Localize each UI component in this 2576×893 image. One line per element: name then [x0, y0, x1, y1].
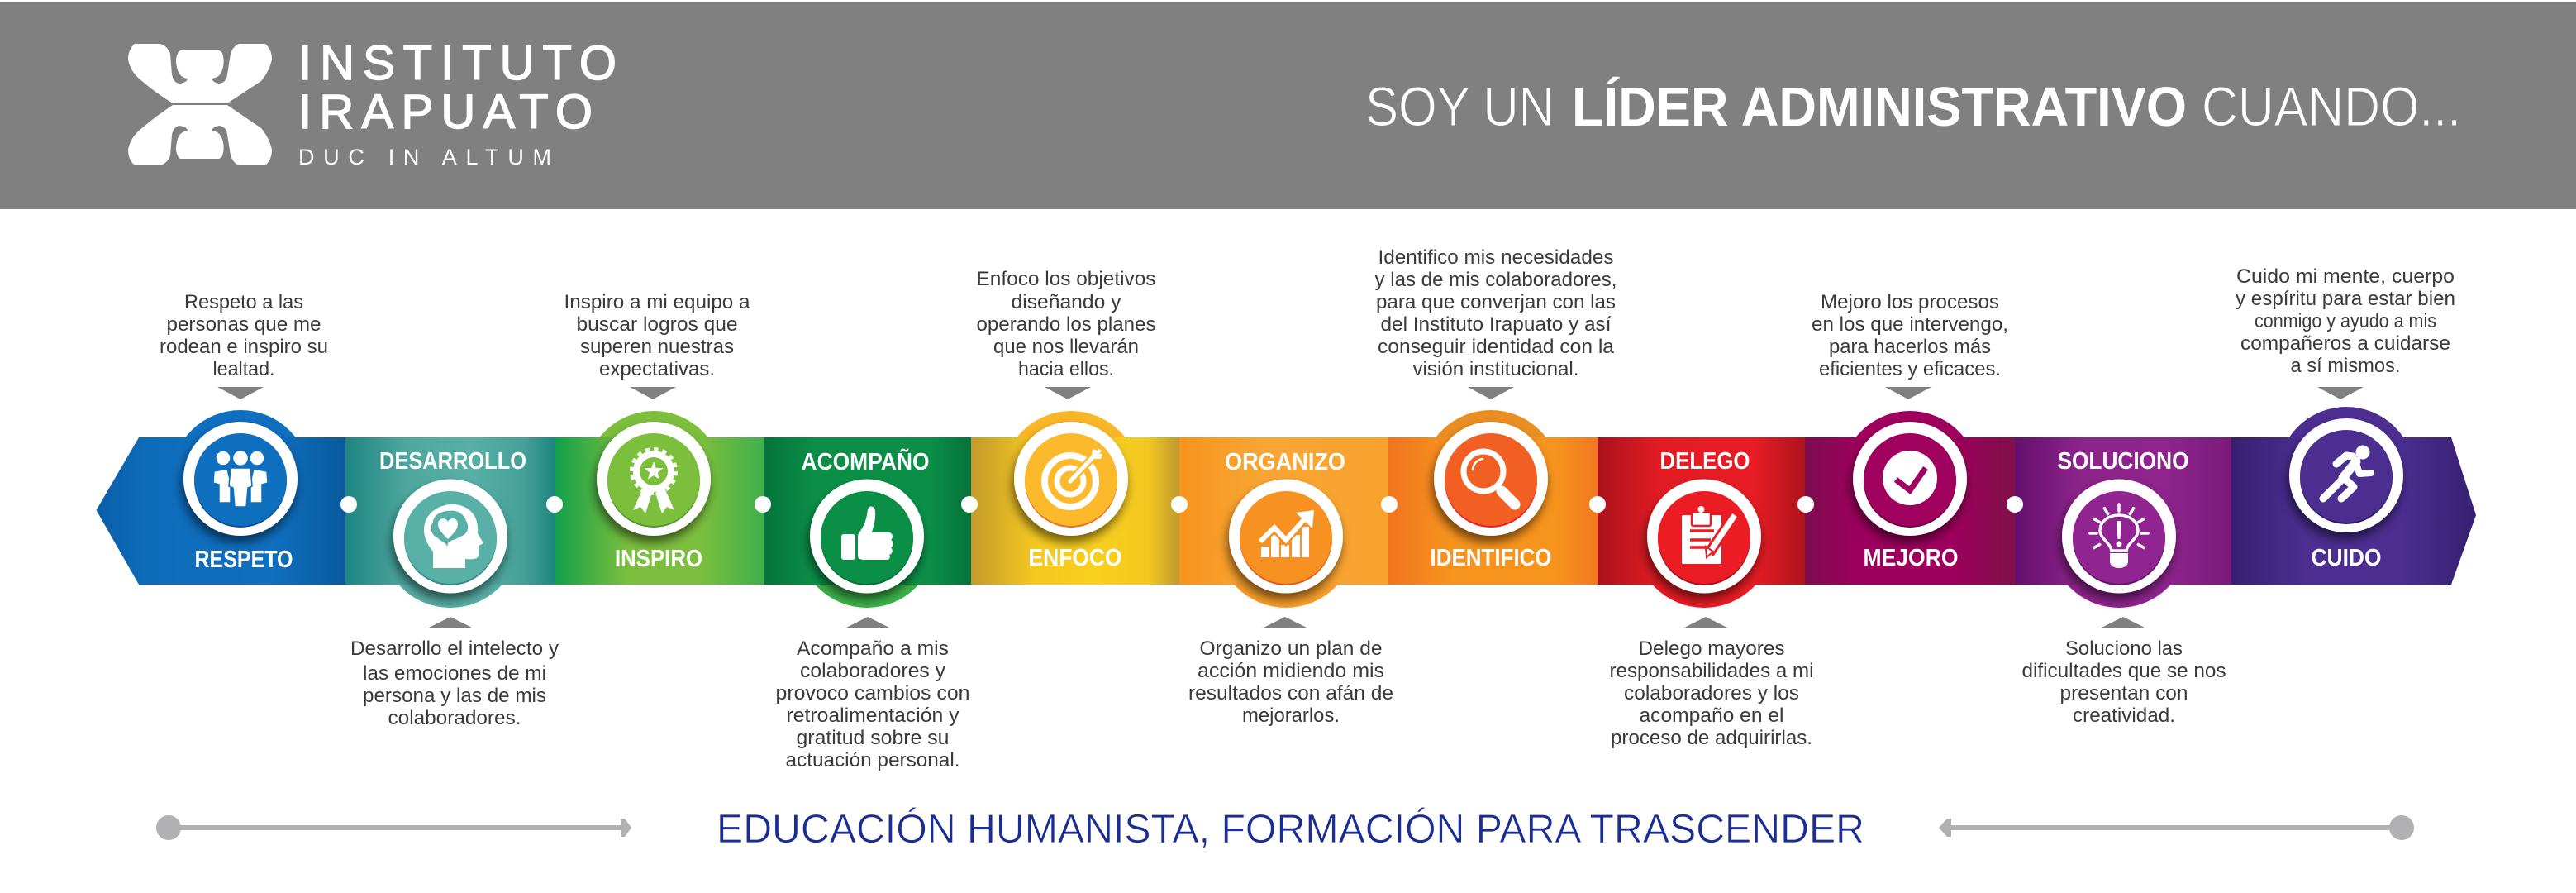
text: identifico: visión institucional. [1413, 358, 1578, 380]
text: inspiro: buscar logros que [577, 313, 737, 336]
label: MEJORO [1863, 545, 1959, 571]
text: organizo: resultados con afán de [1188, 682, 1393, 704]
icon: clipboard [1682, 506, 1735, 564]
step: delego [1647, 448, 1761, 594]
connector dots [340, 496, 2023, 513]
text: enfoco: operando los planes [977, 313, 1155, 336]
text: organizo: acción midiendo mis [1198, 660, 1384, 682]
arrow: footer right [1939, 815, 2414, 840]
text: desarrollo: persona y las de mis [363, 685, 546, 707]
text: organizo: Organizo un plan de [1200, 638, 1382, 660]
text: soluciono: dificultades que se nos [2021, 660, 2226, 682]
text: desarrollo: Desarrollo el intelecto y [350, 638, 559, 660]
text: mejoro: para hacerlos más [1829, 336, 1991, 358]
step: enfoco [1014, 422, 1128, 571]
icon: magnifier [1464, 451, 1515, 504]
text: delego: colaboradores y los [1624, 682, 1799, 704]
label: IDENTIFICO [1430, 545, 1552, 571]
footer slogan: EDUCACIÓN HUMANISTA, FORMACIÓN PARA TRASCENDER [717, 807, 1864, 852]
text: soluciono [2021, 638, 2226, 727]
logo wordmark: IRAPUATO [298, 85, 593, 139]
step: acompano [802, 447, 929, 594]
step: respeto [183, 422, 298, 573]
text: soluciono: creatividad. [2073, 704, 2175, 727]
icon: head with heart [424, 504, 483, 568]
title: SOY UN [1365, 76, 1555, 138]
step: soluciono [2058, 448, 2188, 594]
step: organizo [1225, 449, 1345, 594]
icon: rosette [631, 449, 676, 513]
step: mejoro [1853, 422, 1967, 571]
step: inspiro [597, 422, 711, 572]
text: enfoco: diseñando y [1012, 291, 1121, 313]
text: inspiro [564, 291, 750, 380]
text: mejoro: Mejoro los procesos [1821, 291, 1999, 313]
text: identifico: conseguir identidad con la [1378, 336, 1615, 358]
text: identifico: y las de mis colaboradores, [1375, 269, 1617, 291]
text: soluciono: presentan con [2059, 682, 2188, 704]
text: cuido [2236, 265, 2455, 377]
text: desarrollo [350, 638, 559, 729]
text: acompano: gratitud sobre su [797, 727, 949, 749]
label: ENFOCO [1028, 545, 1122, 571]
icon: check mark [1883, 451, 1937, 505]
title: LÍDER ADMINISTRATIVO [1572, 76, 2187, 138]
label: DELEGO [1659, 448, 1750, 475]
label: INSPIRO [615, 546, 702, 572]
text: delego: Delego mayores [1638, 638, 1785, 660]
text: acompano [775, 638, 970, 771]
text: inspiro: expectativas. [599, 358, 715, 380]
text: enfoco: que nos llevarán [993, 336, 1139, 358]
text: respeto [160, 291, 328, 380]
pointer triangles [217, 387, 2364, 628]
header banner [0, 2, 2576, 209]
text: cuido: a sí mismos. [2291, 355, 2400, 377]
icon: growth chart [1260, 510, 1314, 557]
text: delego: proceso de adquirirlas. [1611, 727, 1812, 749]
text: mejoro [1812, 291, 2008, 380]
step: desarrollo [379, 448, 526, 594]
icon: people [213, 450, 268, 507]
text: enfoco: hacia ellos. [1018, 358, 1114, 380]
text: inspiro: Inspiro a mi equipo a [564, 291, 750, 313]
icon: target [1045, 448, 1102, 507]
label: CUIDO [2311, 545, 2382, 571]
step: identifico [1430, 422, 1552, 571]
label: ORGANIZO [1225, 449, 1345, 475]
icon halos behind ribbon [171, 407, 2415, 608]
logo emblem [128, 44, 272, 165]
text: cuido: y espíritu para estar bien [2236, 288, 2455, 310]
title: CUANDO... [2202, 76, 2461, 138]
text: soluciono: Soluciono las [2065, 638, 2183, 660]
text: desarrollo: colaboradores. [388, 707, 521, 729]
icon: light bulb [2090, 504, 2148, 568]
text: acompano: actuación personal. [785, 749, 960, 771]
text: mejoro: eficientes y eficaces. [1819, 358, 2001, 380]
text: acompano: Acompaño a mis [797, 638, 949, 660]
step: cuido [2289, 418, 2403, 571]
ribbon [96, 437, 2476, 585]
text: enfoco [977, 268, 1155, 380]
text: mejoro: en los que intervengo, [1812, 313, 2008, 336]
text: desarrollo: las emociones de mi [363, 662, 546, 685]
text: identifico: del Instituto Irapuato y así [1380, 313, 1612, 336]
text: identifico [1375, 246, 1617, 380]
text: identifico: para que converjan con las [1376, 291, 1616, 313]
logo wordmark: INSTITUTO [298, 36, 617, 90]
icon: runner [2323, 445, 2371, 499]
text: respeto: rodean e inspiro su [160, 336, 328, 358]
text: organizo: mejorarlos. [1242, 704, 1340, 727]
text: delego [1610, 638, 1813, 749]
label: ACOMPAÑO [802, 447, 929, 475]
logo wordmark [298, 36, 617, 170]
text: cuido: compañeros a cuidarse [2240, 332, 2450, 355]
text: delego: responsabilidades a mi [1610, 660, 1813, 682]
icon: thumbs up [841, 506, 893, 560]
text: organizo [1188, 638, 1393, 727]
text: cuido: Cuido mi mente, cuerpo [2236, 265, 2455, 288]
text: respeto: Respeto a las [184, 291, 303, 313]
title [1365, 76, 2461, 138]
label: RESPETO [195, 547, 293, 573]
label: SOLUCIONO [2058, 448, 2188, 475]
text: respeto: lealtad. [213, 358, 274, 380]
text: acompano: retroalimentación y [787, 704, 959, 727]
text: enfoco: Enfoco los objetivos [977, 268, 1155, 290]
arrow: footer left [156, 815, 631, 840]
text: delego: acompaño en el [1640, 704, 1783, 727]
logo wordmark: DUC IN ALTUM [298, 145, 551, 170]
text: identifico: Identifico mis necesidades [1378, 246, 1613, 269]
text: acompano: colaboradores y [800, 660, 945, 682]
text: respeto: personas que me [167, 313, 321, 336]
text: inspiro: superen nuestras [580, 336, 734, 358]
text: acompano: provoco cambios con [775, 682, 970, 704]
label: DESARROLLO [379, 448, 526, 475]
text: cuido: conmigo y ayudo a mis [2255, 310, 2436, 332]
